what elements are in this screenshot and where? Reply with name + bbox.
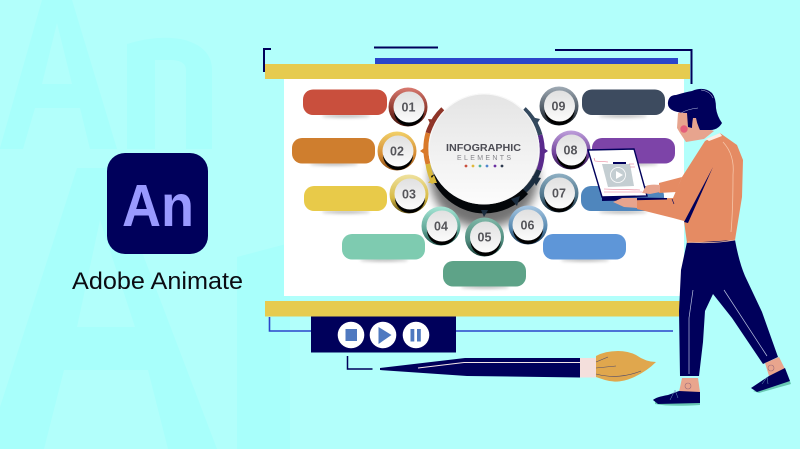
colour dots — [465, 165, 503, 167]
panel: white screen — [284, 79, 684, 296]
number badge 05 — [465, 218, 504, 256]
cheek — [680, 125, 688, 133]
pill 03 — [304, 186, 387, 211]
laptop — [588, 149, 667, 201]
number badge 03 — [390, 174, 428, 214]
number badge 01 — [388, 88, 428, 126]
ring segments — [426, 109, 542, 199]
front hand — [613, 198, 637, 208]
disc face — [428, 94, 540, 204]
pill 01 — [303, 90, 387, 115]
number badge 08 — [552, 130, 590, 170]
brush bracket line — [348, 356, 372, 369]
number badge 06: 06 — [521, 218, 534, 232]
blue bar above screen — [375, 58, 678, 64]
pill shadows — [310, 114, 658, 288]
character: man with laptop — [588, 89, 791, 406]
number badge 04 — [422, 206, 460, 246]
central disc — [420, 94, 548, 228]
top frame lines — [264, 48, 692, 84]
pill 02 — [292, 138, 375, 164]
brush handle — [380, 358, 580, 378]
trousers — [679, 240, 778, 376]
brush bristles — [596, 351, 656, 382]
media controls — [311, 316, 456, 352]
title: Adobe Animate: Adobe Animate — [72, 268, 243, 295]
logo: Adobe Animate — [107, 153, 208, 254]
label: INFOGRAPHIC: INFOGRAPHIC — [446, 142, 521, 154]
logo: Adobe Animate: An — [122, 173, 194, 239]
number badge 07 — [540, 174, 578, 212]
top yellow bar — [265, 64, 690, 79]
torso — [637, 133, 743, 243]
icon: stop — [338, 322, 364, 348]
pill 09 — [582, 90, 665, 115]
neck and face — [677, 110, 714, 142]
label: ELEMENTS: ELEMENTS — [457, 155, 511, 162]
number badge 02 — [378, 132, 416, 170]
number badge 07: 07 — [552, 186, 566, 200]
left foot — [653, 378, 700, 406]
icon: play — [370, 322, 396, 348]
number badge 04: 04 — [434, 220, 448, 234]
laptop base — [602, 197, 667, 201]
pill 06 — [543, 234, 626, 260]
back arm — [659, 177, 682, 193]
background watermark letters — [0, 0, 290, 449]
number badge 06 — [508, 206, 548, 244]
pill 04 — [342, 234, 425, 260]
brush ferrule — [580, 358, 596, 378]
hair — [668, 89, 722, 130]
infographic pills — [292, 90, 675, 288]
video card — [602, 164, 634, 187]
number badge 03: 03 — [402, 188, 416, 202]
icon: pause — [403, 322, 429, 348]
number badge 01: 01 — [402, 100, 415, 114]
pill 07 — [581, 186, 664, 211]
torso folds — [723, 142, 733, 232]
paintbrush — [380, 351, 656, 382]
dark crescent — [431, 150, 528, 214]
right foot — [751, 357, 791, 393]
ring arrow tips — [420, 117, 548, 217]
number badge 09 — [540, 86, 578, 126]
number badge 05: 05 — [478, 230, 491, 244]
pill 08 — [592, 138, 675, 164]
back hand — [642, 185, 660, 194]
number badge 08: 08 — [564, 144, 577, 158]
bottom frame lines — [270, 317, 673, 331]
pill 05 — [443, 261, 526, 286]
number badge 09: 09 — [552, 100, 565, 114]
number badge 02: 02 — [390, 144, 404, 158]
disc shadow — [430, 128, 538, 228]
collar — [706, 133, 722, 141]
bottom yellow bar — [265, 301, 691, 316]
laptop screen — [588, 149, 647, 197]
